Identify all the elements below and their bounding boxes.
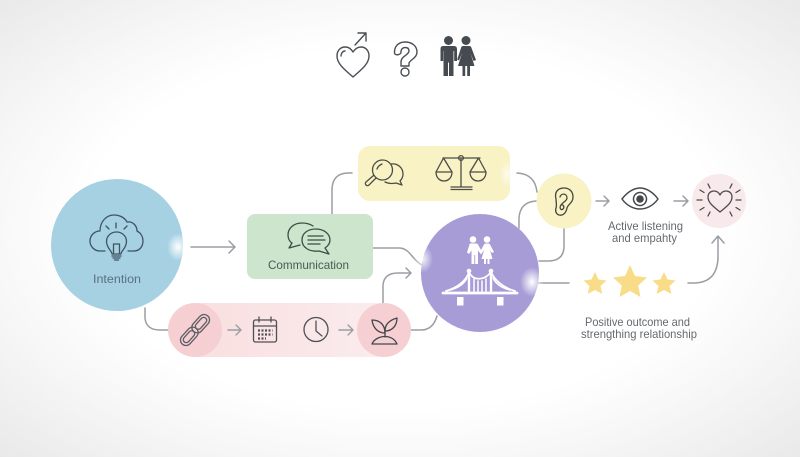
connector: purple to ear bottom <box>539 228 564 261</box>
icon: white bridge <box>443 269 517 293</box>
panel: intention circle <box>51 179 189 311</box>
connector: communication to yellow box <box>332 173 352 214</box>
arrow: link to calendar <box>228 325 241 335</box>
connector lines <box>145 173 724 330</box>
arrow: stars to heart <box>688 236 724 283</box>
icon: cloud with light bulb <box>90 215 143 260</box>
icon: stars <box>584 265 676 297</box>
text: positive outcome <box>581 315 697 341</box>
panel: ear circle <box>536 174 592 228</box>
panel: yellow box <box>358 146 514 201</box>
circle: sprout <box>357 303 411 357</box>
connector: communication to purple <box>373 248 422 265</box>
connector: sprout to purple arrow <box>383 268 411 303</box>
text: active listening: Active listening <box>608 219 683 233</box>
icon: speech bubbles <box>288 223 330 254</box>
text: positive outcome: strengthing relationship <box>581 327 697 341</box>
circle: link <box>168 303 222 357</box>
connector: intention to pink <box>145 308 168 330</box>
glow <box>500 161 514 187</box>
arrow: ear to eye <box>596 196 609 206</box>
glow right <box>520 267 544 297</box>
icon: scales <box>436 156 486 190</box>
icon: calendar <box>254 317 276 342</box>
icon: clock <box>304 318 328 342</box>
icon: sprout <box>372 318 397 344</box>
icon: white couple <box>467 236 494 264</box>
panel: communication <box>247 214 373 279</box>
icon: chain link <box>178 312 212 348</box>
text: active listening <box>608 219 683 245</box>
icon: magnifier and speech <box>365 160 403 186</box>
icon: ear <box>556 188 573 215</box>
panel: relationship timeline bar <box>168 303 411 357</box>
arrow: eye to heart <box>674 196 688 206</box>
icon: radiant heart <box>697 184 741 216</box>
connector: sprout right to purple <box>411 316 437 330</box>
icon: question dot <box>401 68 409 76</box>
label: communication: Communication <box>268 258 349 272</box>
icon: couple <box>440 36 476 76</box>
arrow: intention to communication <box>191 241 235 253</box>
connector: purple to ear <box>519 201 536 228</box>
top icon group <box>337 33 476 77</box>
text: positive outcome: Positive outcome and <box>585 315 690 329</box>
icon: question mark <box>394 42 417 66</box>
glow <box>167 233 189 261</box>
icon: eye <box>622 188 658 209</box>
bridge piers <box>457 297 504 306</box>
connector: yellow box to ear <box>517 173 537 192</box>
panel: bridge circle <box>413 214 544 332</box>
glow left <box>413 245 433 273</box>
icon: heart with arrow <box>337 33 369 77</box>
label: intention: Intention <box>93 272 141 286</box>
text: active listening: and empahty <box>612 231 677 245</box>
connector: purple to stars <box>531 282 569 284</box>
arrow: clock to sprout <box>339 325 353 335</box>
panel: heart circle <box>692 174 746 228</box>
